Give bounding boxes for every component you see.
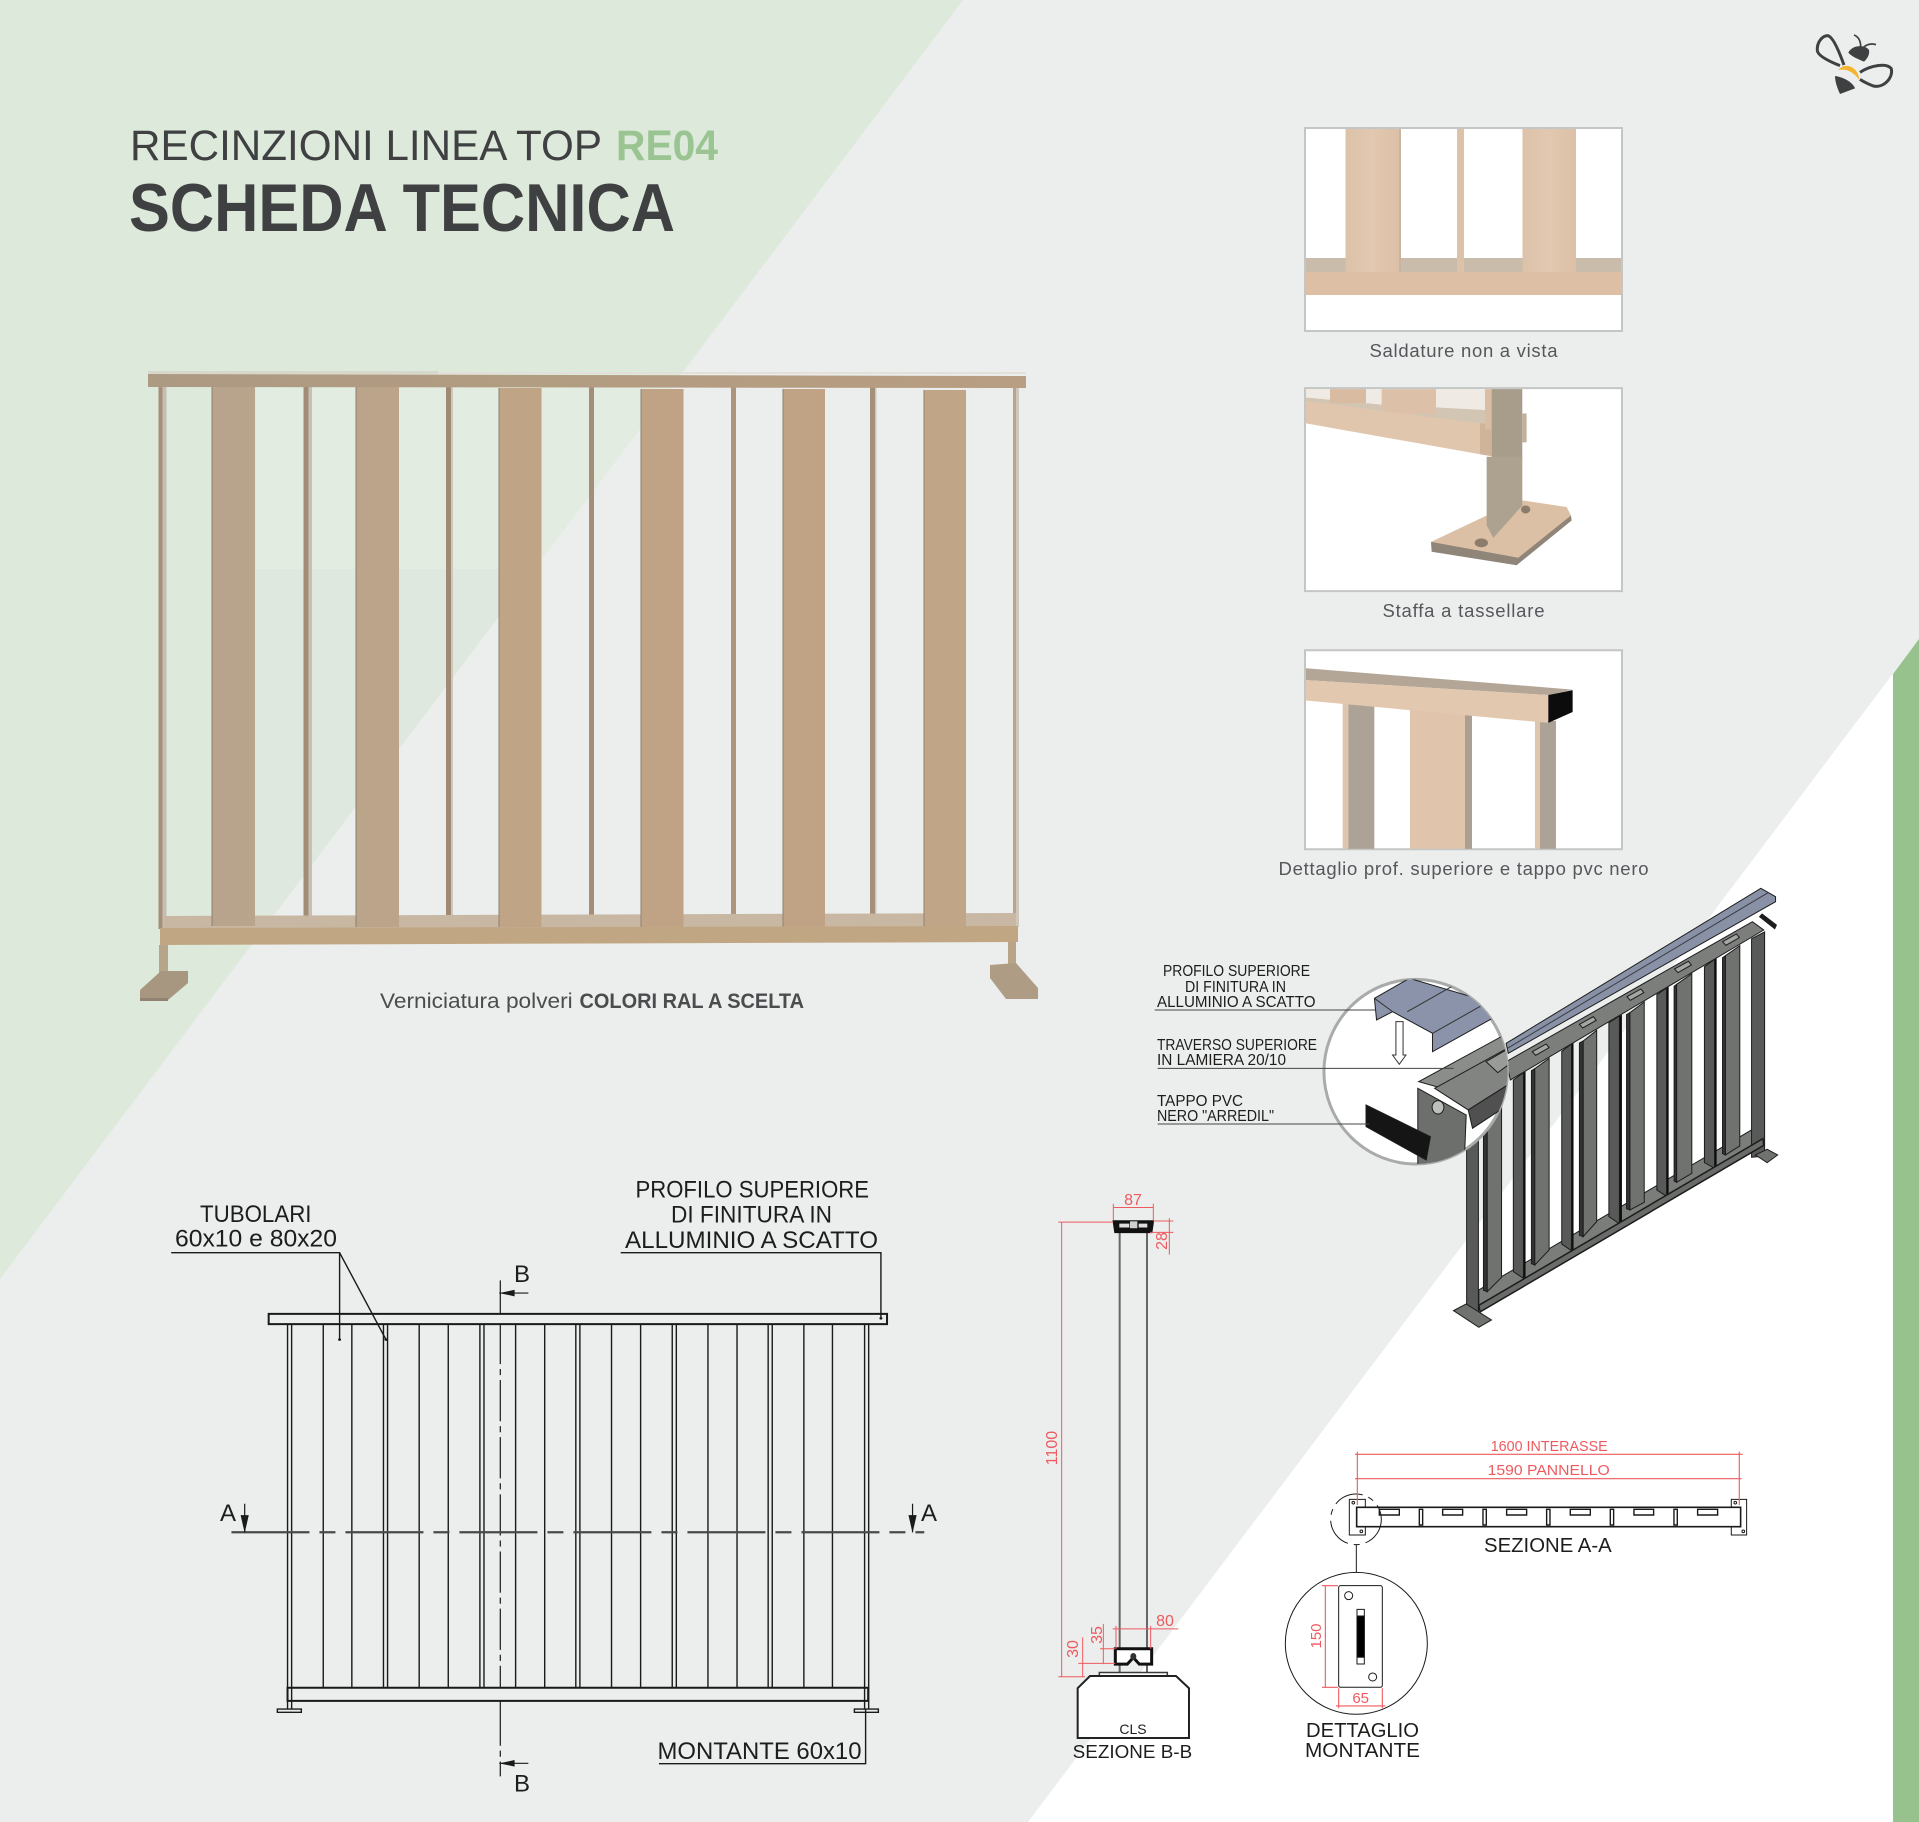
detail lens contents (1366, 978, 1510, 1167)
iso: bottom rail front (1479, 1139, 1764, 1312)
lens: aluminium profile (1374, 980, 1492, 1052)
lens: top piece (1486, 1050, 1510, 1073)
iso: slots in top rail (1532, 934, 1739, 1055)
background: white diagonal (1028, 639, 1919, 1822)
section B-B: top cap void (1119, 1224, 1147, 1227)
title: SCHEDA TECNICA (129, 170, 675, 246)
iso labels: TAPPO PVC (1157, 1093, 1243, 1110)
section B-B: concrete block (1078, 1676, 1189, 1738)
elevation: section line A-A (231, 1531, 924, 1533)
section B-B: red dimension values: 28 (1154, 1232, 1171, 1250)
lens: beam underside (1468, 1083, 1510, 1128)
elevation: section line B-B (499, 1280, 501, 1776)
section B-B: red dimensions (1058, 1204, 1178, 1677)
technical drawing: section B-B (1044, 1192, 1192, 1762)
background: green side band (1893, 639, 1919, 1822)
elevation labels: ALLUMINIO A SCATTO (625, 1227, 878, 1254)
elevation: vertical tubes (288, 1324, 869, 1709)
background: light green diagonal (0, 0, 963, 1279)
detail: holes (1345, 1592, 1377, 1681)
elevation labels: B (514, 1770, 530, 1798)
detail: plate (1339, 1586, 1382, 1687)
detail lens (1324, 979, 1507, 1164)
section A-A: labels (1305, 1535, 1612, 1762)
lens: cross beam side (1435, 1047, 1510, 1110)
elevation labels: PROFILO SUPERIORE (636, 1176, 869, 1204)
detail: slot fill (1357, 1616, 1364, 1657)
background: greyer tint behind lower photo (256, 569, 534, 926)
section B-B: red dimension values: 87 (1124, 1192, 1142, 1209)
section B-B: red dimension values: 1100 (1044, 1431, 1061, 1465)
section B-B: red dimension values: 30 (1065, 1640, 1082, 1658)
technical drawing: front elevation (171, 1176, 937, 1798)
elevation labels: TUBOLARI (200, 1201, 312, 1228)
section B-B: bolt (1130, 1653, 1136, 1660)
elevation: leader dots (338, 1317, 882, 1341)
photo panel: anchor bracket (1305, 388, 1622, 591)
section B-B: top cap bolt (1130, 1221, 1137, 1228)
section A-A: labels: SEZIONE A-A (1484, 1535, 1612, 1557)
section A-A: detail link (1355, 1545, 1357, 1572)
background: lighter tint behind upper photo (256, 387, 672, 569)
lens: bolt (1432, 1101, 1444, 1114)
red dimensions (1322, 1452, 1743, 1708)
elevation labels: B (514, 1261, 530, 1288)
elevation labels: A (220, 1500, 236, 1527)
iso labels: IN LAMIERA 20/10 (1157, 1052, 1286, 1069)
isometric exploded view of fence (1155, 888, 1778, 1327)
section B-B: red dimension values: 80 (1156, 1613, 1174, 1630)
section A-A: main bar (1357, 1507, 1741, 1527)
section A-A: horizontal slots (1379, 1509, 1718, 1515)
section B-B: base plate (1099, 1673, 1167, 1676)
main photo: powder-coated fence panel (140, 371, 1038, 1001)
section B-B: post (1120, 1232, 1147, 1673)
lens: pvc cap (1366, 1105, 1430, 1160)
elevation: section arrows (245, 1293, 913, 1763)
elevation labels: DI FINITURA IN (671, 1201, 832, 1228)
elevation: arrowheads (241, 1290, 917, 1767)
section A-A: red values: 150 (1308, 1623, 1325, 1649)
iso labels: TRAVERSO SUPERIORE (1157, 1037, 1317, 1054)
section A-A: labels: MONTANTE (1305, 1740, 1420, 1762)
section B-B: labels: SEZIONE B-B (1073, 1742, 1192, 1762)
elevation: feet (277, 1709, 878, 1712)
section A-A: red values (1308, 1438, 1610, 1707)
section A-A: red values: 65 (1352, 1690, 1369, 1707)
section A-A: labels: DETTAGLIO (1306, 1720, 1419, 1742)
caption: top profile and cap: Dettaglio prof. superiore e tappo pvc nero (1278, 858, 1648, 879)
section B-B: labels: CLS (1119, 1721, 1147, 1737)
lens: profile lines (1374, 987, 1481, 1033)
iso: sides of wide tubes (1483, 956, 1725, 1292)
section B-B: top cap (1113, 1221, 1153, 1232)
elevation: top rail (269, 1314, 887, 1324)
iso: narrow tube black sides (1523, 958, 1717, 1279)
technical drawing: section A-A (1285, 1438, 1747, 1762)
elevation labels: MONTANTE 60x10 (658, 1738, 862, 1765)
elevation labels (175, 1176, 937, 1798)
detail: slot (1357, 1609, 1364, 1664)
title: RE04 (616, 122, 718, 170)
iso: right foot (1755, 1149, 1778, 1163)
photo panel: top profile and black pvc cap (1305, 650, 1622, 849)
iso: bottom band (1479, 1123, 1763, 1310)
elevation: leaders (171, 1253, 881, 1764)
iso: top rail (1506, 922, 1764, 1080)
logo: bee (1817, 35, 1892, 94)
lens: post (1418, 1088, 1466, 1167)
section B-B: bottom clamp (1115, 1649, 1152, 1664)
iso labels: NERO "ARREDIL" (1157, 1108, 1274, 1125)
elevation labels: A (921, 1500, 937, 1527)
caption: anchor bracket: Staffa a tassellare (1382, 600, 1544, 621)
iso: wide tube faces (1487, 946, 1740, 1292)
elevation labels: 60x10 e 80x20 (175, 1226, 337, 1252)
caption: powder coating colours (380, 990, 804, 1013)
lens: cross beam top (1417, 1036, 1505, 1087)
section B-B: red dimension values (1044, 1192, 1174, 1658)
lens: down arrow (1393, 1022, 1406, 1064)
iso labels: DI FINITURA IN (1185, 979, 1286, 996)
iso: profile fold line (1507, 893, 1768, 1048)
caption: hidden welds: Saldature non a vista (1370, 340, 1558, 361)
section B-B: red dimension values: 35 (1089, 1626, 1106, 1644)
iso: left foot (1454, 1304, 1491, 1327)
iso: top finishing profile (1506, 888, 1776, 1053)
section A-A: red values: 1590 PANNELLO (1488, 1462, 1610, 1479)
iso labels (1157, 963, 1317, 1125)
section A-A: detail marker (1331, 1494, 1381, 1545)
section A-A: red values: 1600 INTERASSE (1491, 1438, 1608, 1455)
section A-A: end plates (1349, 1499, 1747, 1535)
section B-B: labels (1073, 1721, 1192, 1762)
iso: dark narrow tubes (1467, 932, 1765, 1317)
title: RECINZIONI LINEA TOP (130, 122, 602, 170)
leader lines (1155, 1010, 1454, 1124)
iso labels: ALLUMINIO A SCATTO (1157, 994, 1316, 1011)
iso labels: PROFILO SUPERIORE (1163, 963, 1310, 980)
elevation: bottom rail (288, 1688, 868, 1701)
photo panel: hidden welds (1305, 128, 1622, 331)
detail: large circle (1285, 1572, 1427, 1714)
iso: end cap (1760, 914, 1776, 929)
section A-A: plate holes (1352, 1501, 1745, 1533)
section A-A: vertical slots (1419, 1509, 1677, 1525)
caption: powder coating colours: Verniciatura polveri (380, 990, 573, 1013)
caption: powder coating colours: COLORI RAL A SCELTA (580, 990, 804, 1013)
title (129, 122, 718, 246)
